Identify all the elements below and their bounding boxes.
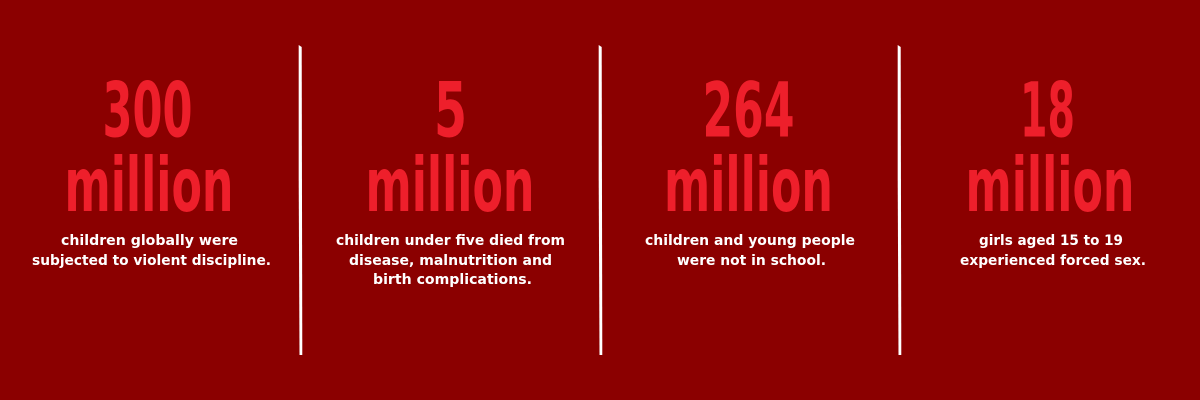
description: subjected to violent discipline.: [32, 253, 271, 269]
divider 3: [898, 45, 901, 355]
number: 18: 18: [1020, 66, 1075, 154]
divider 1: [299, 45, 302, 355]
description: children under five died from: [336, 233, 565, 249]
unit: million: million: [64, 141, 234, 229]
description: [645, 233, 855, 269]
description: [32, 233, 271, 269]
description: children and young people: [645, 233, 855, 249]
description: children globally were: [61, 233, 238, 249]
divider 2: [599, 45, 602, 355]
panel: 264 million children: [645, 66, 855, 269]
number: 300: 300: [102, 66, 192, 154]
panel: 5 million children: [336, 66, 565, 288]
unit: million: million: [366, 141, 534, 229]
description: girls aged 15 to 19: [979, 233, 1123, 249]
number: 5: 5: [434, 66, 467, 154]
description: [336, 233, 565, 288]
unit: million: million: [664, 141, 833, 229]
description: birth complications.: [373, 272, 532, 288]
number: 264: 264: [702, 66, 794, 154]
panel: 18 million girls: [960, 66, 1146, 269]
panel: 300 million children: [32, 66, 271, 269]
description: experienced forced sex.: [960, 253, 1146, 269]
description: [960, 233, 1146, 269]
description: were not in school.: [677, 253, 826, 269]
description: disease, malnutrition and: [349, 253, 552, 269]
